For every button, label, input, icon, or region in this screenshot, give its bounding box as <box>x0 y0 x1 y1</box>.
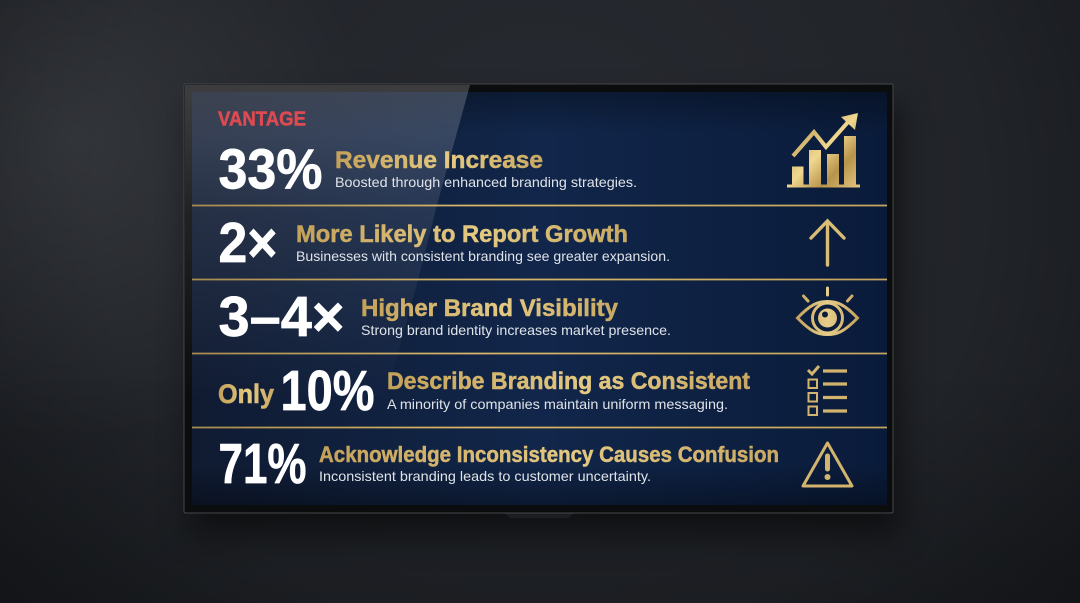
logo: VANTAGE: VANTAGE <box>218 108 306 130</box>
stat: 71%: 71% <box>218 432 306 496</box>
icon: warning triangle <box>803 443 852 486</box>
monitor <box>184 84 893 518</box>
icon: checklist <box>808 366 847 415</box>
row 5: confusion <box>218 432 852 496</box>
row 2: report growth <box>218 211 844 275</box>
heading: Acknowledge Inconsistency Causes Confusion: Acknowledge Inconsistency Causes Confusion <box>319 442 779 467</box>
monitor screen <box>192 92 887 505</box>
row 4: consistent branding <box>218 359 847 423</box>
label: Only: Only <box>218 379 274 409</box>
screen glare <box>185 85 470 400</box>
description: Boosted through enhanced branding strategies. <box>335 174 637 190</box>
stat: 3-4x: 3–4× <box>218 285 344 349</box>
stat: 33%: 33% <box>218 138 322 202</box>
icon: up arrow <box>811 221 844 265</box>
monitor bezel <box>184 84 893 513</box>
description: Strong brand identity increases market presence. <box>361 322 671 338</box>
description: A minority of companies maintain uniform messaging. <box>387 396 728 412</box>
heading: Revenue Increase: Revenue Increase <box>335 147 543 174</box>
icon: eye <box>798 288 858 334</box>
wall shadow behind monitor <box>190 105 900 535</box>
row 1: revenue increase <box>218 113 860 202</box>
heading: Describe Branding as Consistent: Describe Branding as Consistent <box>387 368 750 395</box>
stat: 2x: 2× <box>218 211 278 275</box>
stat: 10%: 10% <box>280 359 374 423</box>
description: Businesses with consistent branding see greater expansion. <box>296 248 670 264</box>
heading: More Likely to Report Growth: More Likely to Report Growth <box>296 221 628 248</box>
row 3: brand visibility <box>218 285 858 349</box>
icon: rising bar chart <box>787 113 860 188</box>
monitor stand tab <box>505 513 574 518</box>
heading: Higher Brand Visibility: Higher Brand Visibility <box>361 295 619 322</box>
description: Inconsistent branding leads to customer uncertainty. <box>319 468 651 484</box>
